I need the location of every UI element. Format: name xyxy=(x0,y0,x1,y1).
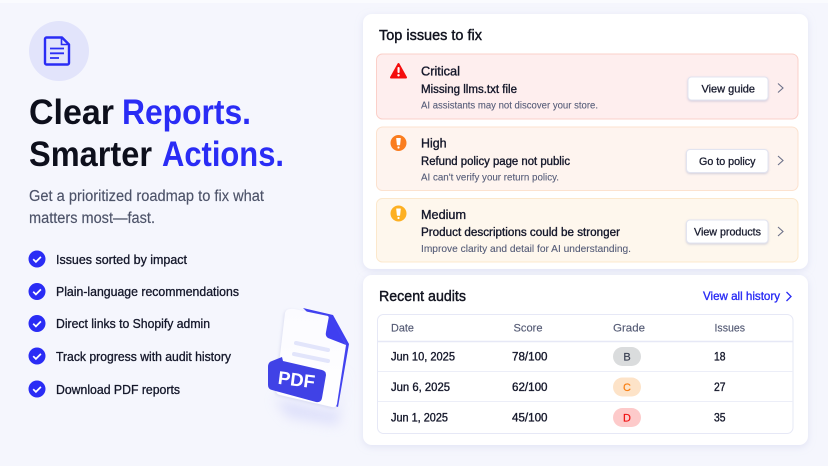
row: Jun 6: 27 xyxy=(714,382,726,394)
issue: medium: Improve clarity and detail for AI understanding. xyxy=(421,243,631,255)
issue: critical: AI assistants may not discover your store. xyxy=(421,100,598,112)
button: view products: View products xyxy=(694,226,761,238)
row: Jun 1: D xyxy=(623,412,631,424)
link: view all history: View all history xyxy=(703,289,780,303)
item: issues sorted xyxy=(28,250,188,268)
issue: critical: Critical xyxy=(421,64,460,78)
title: Smarter xyxy=(29,135,152,174)
button: view guide: View guide xyxy=(702,84,755,96)
title: Clear xyxy=(29,93,114,132)
issue: medium: Medium xyxy=(421,208,466,222)
row: Jun 6 xyxy=(391,378,726,396)
heading: Top issues to fix xyxy=(379,28,483,44)
table header: Date xyxy=(391,322,414,334)
row: Jun 6: 62/100 xyxy=(512,382,548,394)
row: Jun 10 xyxy=(391,347,726,366)
subtitle: matters most—fast. xyxy=(29,210,155,227)
panel: top issues to fix xyxy=(363,14,808,269)
icon: PDF file: PDF xyxy=(277,367,316,392)
icon: PDF file xyxy=(268,308,349,425)
issue: critical xyxy=(376,54,798,119)
item: audit history: Track progress with audit history xyxy=(56,350,232,364)
icon: document in circle xyxy=(29,21,89,81)
item: recommendations: Plain-language recommendations xyxy=(56,285,239,299)
row: Jun 1: 45/100 xyxy=(512,412,548,424)
issue: high: High xyxy=(421,136,447,150)
issue: critical: Missing llms.txt file xyxy=(421,84,517,96)
table header xyxy=(391,322,745,334)
issue: high: Refund policy page not public xyxy=(421,156,570,168)
title: Actions. xyxy=(162,135,284,174)
subtitle xyxy=(29,188,265,227)
row: Jun 1: 35 xyxy=(714,412,726,424)
table header: Grade xyxy=(613,322,645,334)
audit table xyxy=(378,314,793,434)
heading: Recent audits xyxy=(379,289,466,305)
item: direct links: Direct links to Shopify admin xyxy=(56,317,210,331)
row: Jun 10: Jun 10, 2025 xyxy=(391,352,455,364)
item: PDF reports: Download PDF reports xyxy=(56,383,180,397)
issue: medium: Product descriptions could be stronger xyxy=(421,227,620,239)
issue: medium xyxy=(376,198,798,262)
table header: Issues xyxy=(714,322,745,334)
issue: high xyxy=(376,127,798,190)
item: PDF reports xyxy=(28,380,180,398)
button: view guide xyxy=(688,77,768,100)
button: view products xyxy=(686,220,768,243)
button: go to policy xyxy=(686,150,768,172)
row: Jun 1: Jun 1, 2025 xyxy=(391,412,448,424)
row: Jun 6: Jun 6, 2025 xyxy=(391,382,450,394)
button: go to policy: Go to policy xyxy=(699,156,756,168)
item: issues sorted: Issues sorted by impact xyxy=(56,253,188,267)
row: Jun 10: 78/100 xyxy=(512,352,548,364)
title xyxy=(29,93,284,174)
panel: recent audits xyxy=(363,275,808,445)
issue: high: AI can't verify your return policy. xyxy=(421,172,559,184)
subtitle: Get a prioritized roadmap to fix what xyxy=(29,188,265,205)
row: Jun 10: 18 xyxy=(714,352,726,364)
table header: Score xyxy=(514,322,542,334)
row: Jun 1 xyxy=(391,408,726,427)
row: Jun 10: B xyxy=(623,352,631,364)
item: direct links xyxy=(28,315,210,332)
row: Jun 6: C xyxy=(623,382,631,394)
feature checklist xyxy=(28,250,239,398)
title: Reports. xyxy=(122,93,251,132)
